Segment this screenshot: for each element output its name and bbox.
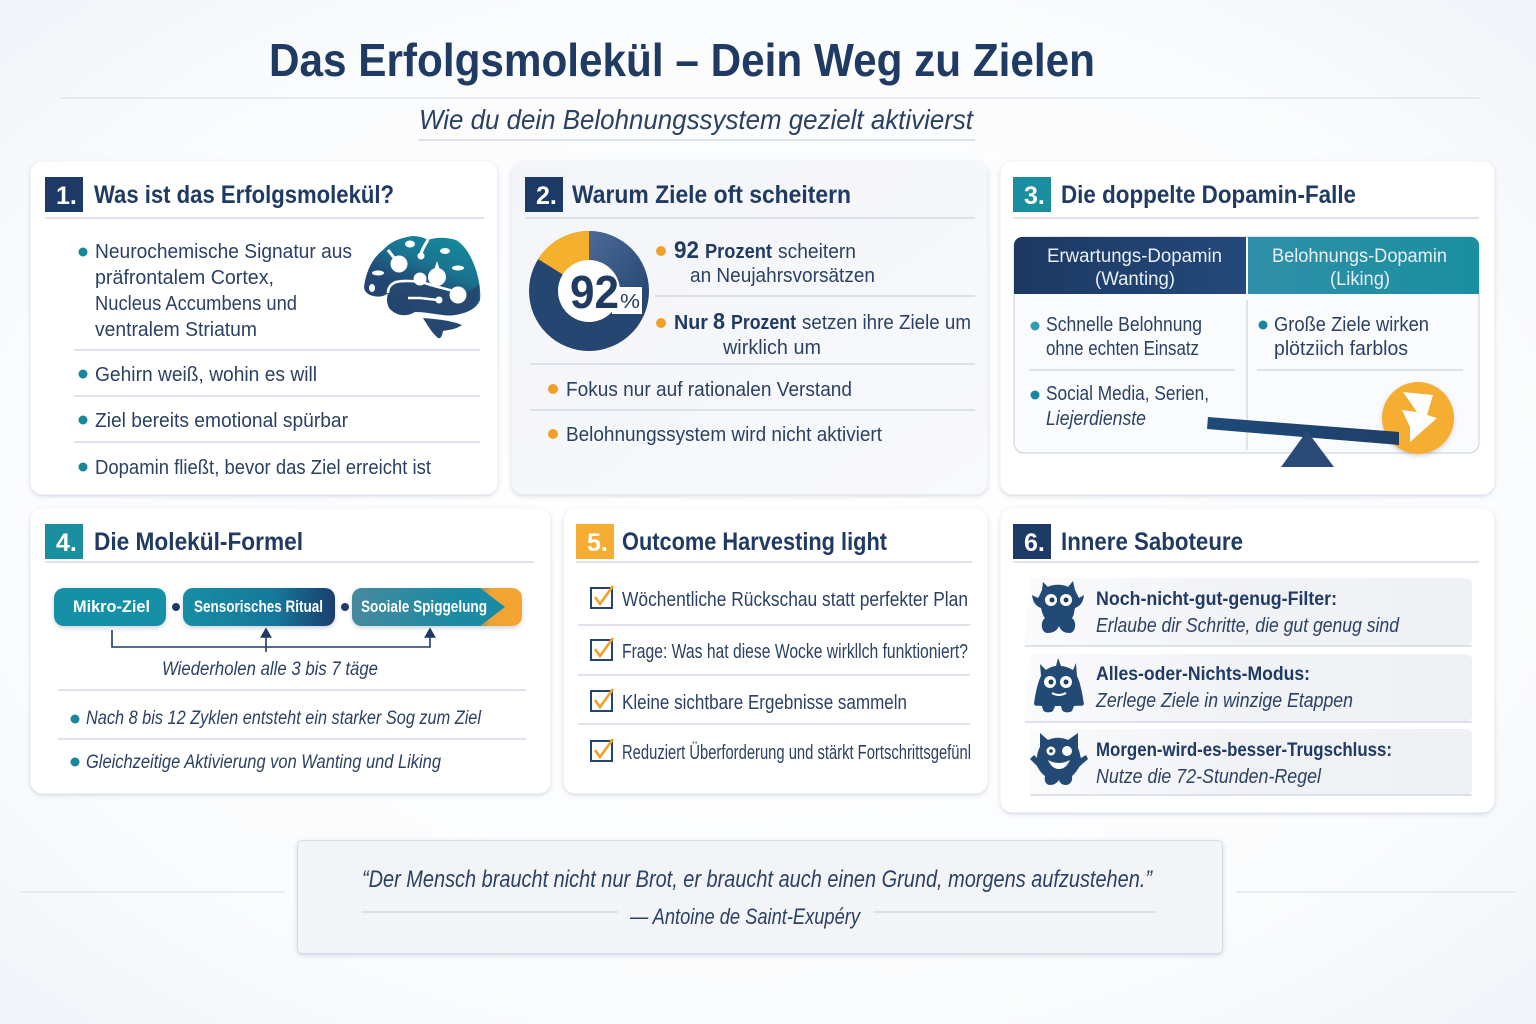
quote attribution: — Antoine de Saint-Exupéry	[629, 904, 862, 929]
stat: 92 Prozent: scheitern	[778, 241, 856, 263]
bullet: Belohnungssystem: Belohnungssystem wird nicht aktiviert	[566, 424, 882, 446]
saboteur row 1	[1024, 578, 1472, 646]
item: Große Ziele: Große Ziele wirken	[1274, 314, 1429, 336]
heading 1: 1.	[56, 182, 77, 210]
stat: 92 Prozent: 92	[674, 237, 699, 264]
item: Schnelle Belohnung: ohne echten Einsatz	[1046, 338, 1199, 360]
bullet: Neurochemische Signatur: Neurochemische Signatur aus	[95, 241, 352, 263]
stat: Nur 8 Prozent	[656, 308, 971, 359]
icon: brain	[364, 236, 480, 338]
chip: Soziale Spiegelung	[352, 588, 522, 626]
icon: monster 1	[1032, 581, 1084, 633]
saboteur row 3: Morgen-wird-es-besser-Trugschluss:	[1096, 740, 1392, 761]
stat: Nur 8 Prozent: wirklich um	[722, 337, 821, 359]
saboteur row 2: Zerlege Ziele in winzige Etappen	[1095, 690, 1353, 712]
column head: Wanting: (Wanting)	[1095, 269, 1175, 290]
heading 1: Was ist das Erfolgsmolekül?	[94, 181, 394, 209]
heading 6	[1013, 524, 1243, 559]
caption: Wiederholen: Wiederholen alle 3 bis 7 täge	[162, 659, 378, 680]
panel 3: Die doppelte Dopamin-Falle	[1000, 162, 1494, 494]
saboteur row 2	[1024, 654, 1472, 722]
bullet: Fokus: Fokus nur auf rationalen Verstand	[566, 379, 852, 401]
panel 1: Was ist das Erfolgsmolekül	[30, 162, 498, 494]
chip: Soziale Spiegelung: Sooiale Spiggelung	[361, 597, 487, 616]
check item 4: Reduziert Überforderung und stärkt Fortschrittsgefünl	[622, 742, 971, 764]
stat: Nur 8 Prozent: setzen ihre Ziele um	[802, 312, 971, 334]
heading 2	[525, 177, 851, 212]
bullet: Zyklen: Nach 8 bis 12 Zyklen entsteht ein starker Sog zum Ziel	[86, 708, 482, 729]
saboteur row 1: Erlaube dir Schritte, die gut genug sind	[1096, 615, 1400, 637]
column head: Liking: Belohnungs-Dopamin	[1272, 246, 1447, 267]
donut chart 92 percent: %	[620, 291, 640, 313]
item: Social Media	[1030, 383, 1209, 430]
stat: Nur 8 Prozent: 8	[713, 308, 725, 334]
heading 5	[576, 524, 888, 559]
item: Schnelle Belohnung	[1030, 314, 1202, 360]
icon: monster 2	[1034, 658, 1084, 712]
item: Social Media: Liejerdienste	[1046, 408, 1146, 430]
comparison table	[1014, 237, 1479, 453]
bullet: Neurochemische Signatur: Nucleus Accumbens und	[95, 293, 297, 315]
stat: 92 Prozent: Prozent	[705, 241, 772, 263]
panel 6: Innere Saboteure	[1000, 508, 1494, 812]
title: Das Erfolgsmolekül – Dein Weg zu Zielen	[269, 34, 1095, 86]
stat: 92 Prozent: an Neujahrsvorsätzen	[690, 265, 875, 287]
heading 4: Die Molekül-Formel	[94, 528, 303, 556]
chip: Mikro-Ziel	[54, 588, 166, 626]
heading 2: Warum Ziele oft scheitern	[572, 181, 851, 209]
heading 1	[45, 177, 394, 212]
heading 5: Outcome Harvesting light	[622, 528, 888, 556]
bullet: Dopamin fließt: Dopamin fließt, bevor das Ziel erreicht ist	[95, 457, 431, 479]
heading 3	[1013, 177, 1356, 212]
heading 3: 3.	[1024, 182, 1045, 210]
item: Social Media: Social Media, Serien,	[1046, 383, 1209, 405]
stat: Nur 8 Prozent: Prozent	[731, 312, 796, 334]
chip: Sensorisches Ritual: Sensorisches Ritual	[194, 597, 323, 616]
column head: Wanting: Erwartungs-Dopamin	[1047, 246, 1222, 267]
heading 5: 5.	[587, 529, 608, 557]
stat: Nur 8 Prozent: Nur	[674, 312, 708, 334]
bullet: Neurochemische Signatur: präfrontalem Cortex,	[95, 267, 274, 289]
item: Schnelle Belohnung: Schnelle Belohnung	[1046, 314, 1202, 336]
donut chart 92 percent: 92	[570, 266, 619, 318]
donut chart 92 percent	[529, 231, 649, 351]
saboteur row 3	[1030, 729, 1472, 795]
chip: Sensorisches Ritual	[183, 588, 335, 626]
heading 6: Innere Saboteure	[1061, 528, 1243, 556]
subtitle: Wie du dein Belohnungssystem gezielt aktivierst	[419, 104, 974, 135]
bullet: Neurochemische Signatur	[78, 241, 352, 341]
check item 3	[591, 689, 907, 714]
check item 2: Frage: Was hat diese Wocke wirkllch funktioniert?	[622, 641, 968, 663]
heading 2: 2.	[536, 182, 557, 210]
saboteur row 1: Noch-nicht-gut-genug-Filter:	[1096, 589, 1337, 610]
check item 4	[591, 739, 971, 764]
item: Große Ziele	[1258, 314, 1429, 360]
loop arrows	[112, 629, 434, 652]
chip: Mikro-Ziel: Mikro-Ziel	[73, 597, 150, 616]
heading 3: Die doppelte Dopamin-Falle	[1061, 181, 1356, 209]
column head: Liking	[1248, 237, 1479, 294]
icon: lightning in orange circle	[1382, 382, 1454, 454]
panel 2: Warum Ziele oft scheitern	[512, 162, 988, 494]
quote text: “Der Mensch braucht nicht nur Brot, er braucht auch einen Grund, morgens aufzustehen.”	[362, 866, 1153, 893]
bullet: Ziel spürbar: Ziel bereits emotional spürbar	[95, 410, 348, 432]
saboteur row 3: Nutze die 72-Stunden-Regel	[1096, 766, 1321, 788]
check item 1: Wöchentliche Rückschau statt perfekter Plan	[622, 589, 968, 611]
bullet: Gehirn weiß: Gehirn weiß, wohin es will	[95, 364, 317, 386]
bullet: Gleichzeitige Aktivierung: Gleichzeitige Aktivierung von Wanting und Liking	[86, 752, 441, 773]
panel 5: Outcome Harvesting light	[564, 508, 988, 794]
column head: Liking: (Liking)	[1330, 269, 1390, 290]
heading 4: 4.	[56, 529, 77, 557]
check item 3: Kleine sichtbare Ergebnisse sammeln	[622, 692, 907, 714]
bullet: Neurochemische Signatur: ventralem Striatum	[95, 319, 257, 341]
quote box	[298, 840, 1222, 954]
heading 6: 6.	[1024, 529, 1045, 557]
heading 4	[45, 524, 303, 559]
stat: 92 Prozent	[656, 237, 875, 287]
column head: Wanting	[1014, 237, 1246, 294]
seesaw	[1207, 417, 1399, 467]
item: Große Ziele: plötziich farblos	[1274, 338, 1408, 360]
check item 2	[591, 638, 968, 663]
icon: monster 3	[1030, 733, 1088, 785]
saboteur row 2: Alles-oder-Nichts-Modus:	[1096, 664, 1310, 685]
panel 4: Die Molekül-Formel	[30, 508, 550, 794]
